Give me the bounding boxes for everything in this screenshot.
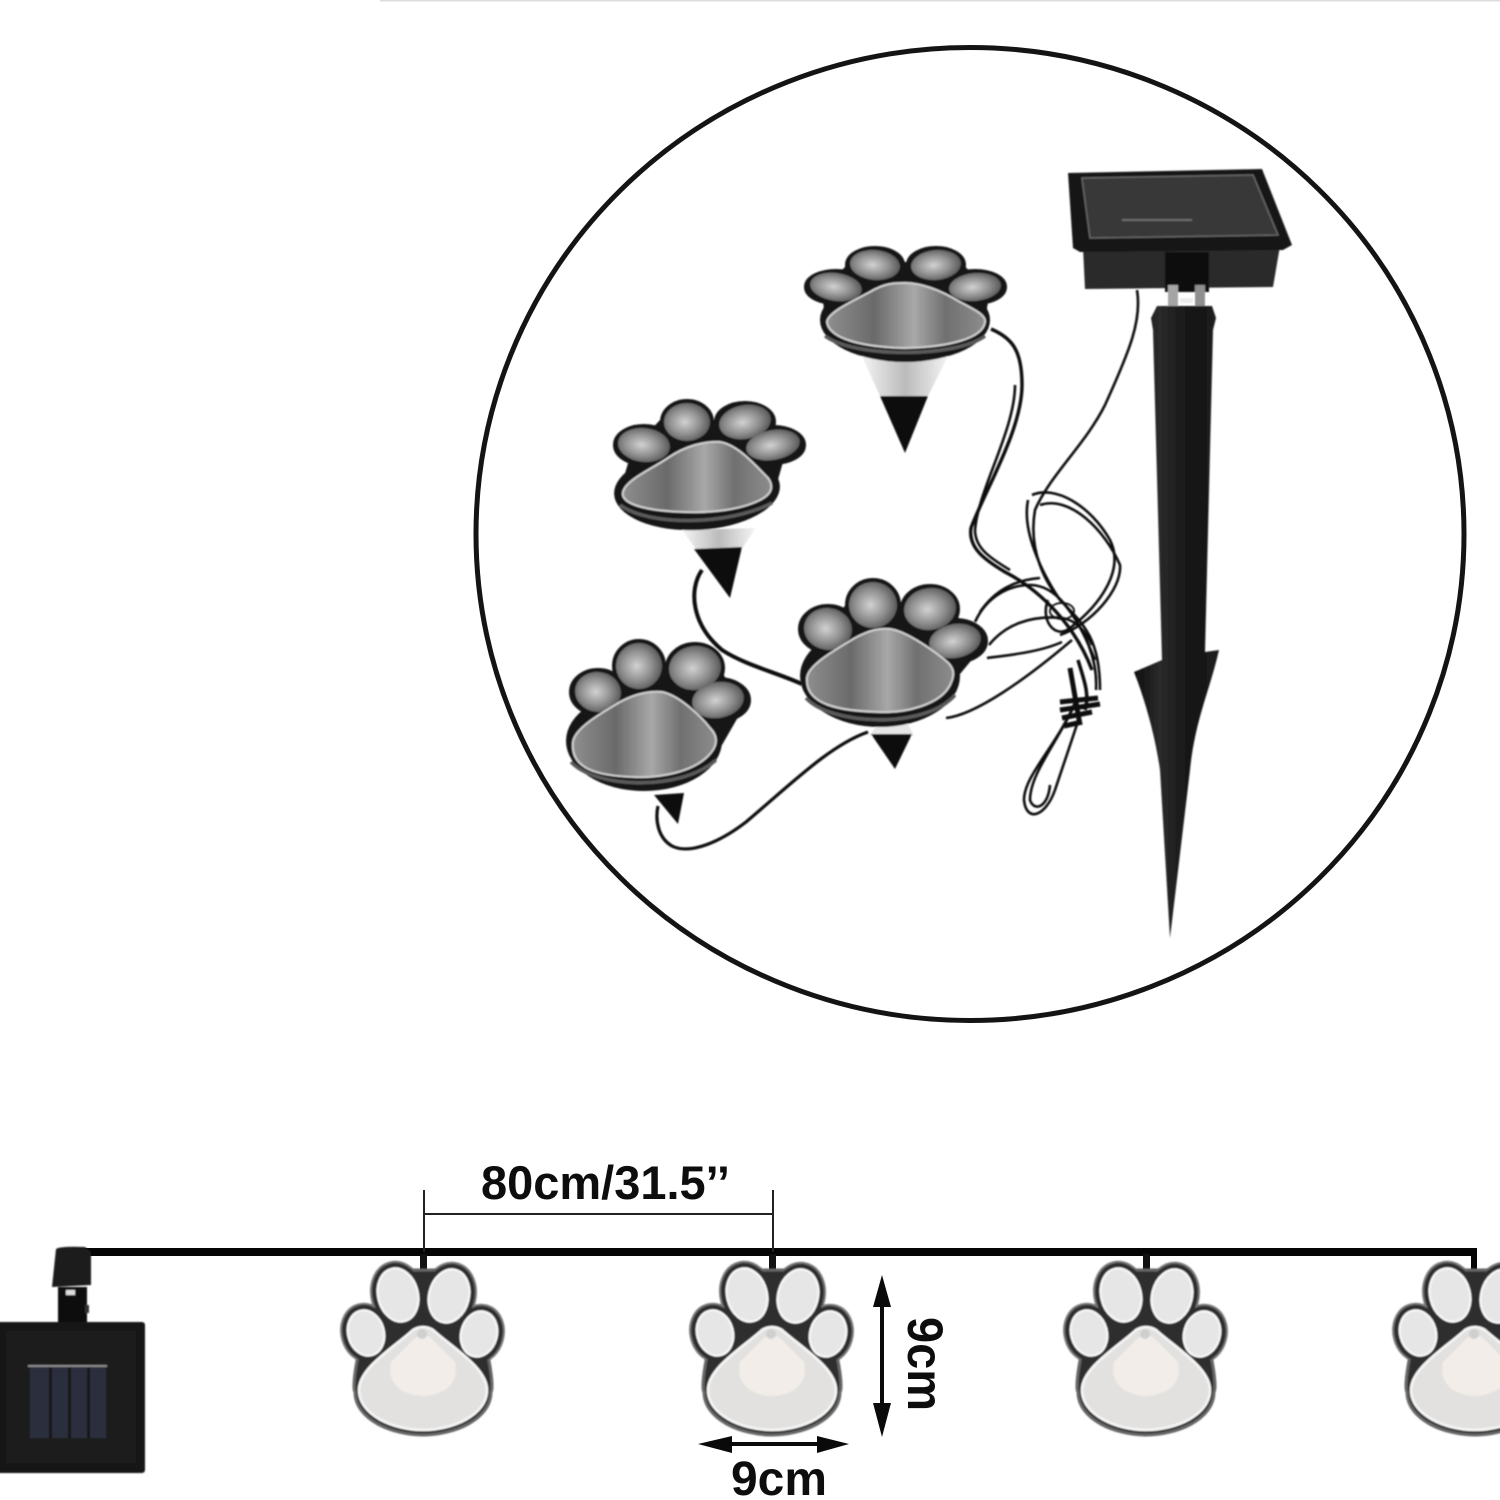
paw light front view 2	[690, 1263, 853, 1435]
panel: product circle	[476, 48, 1464, 1020]
top edge line	[380, 0, 1500, 2]
dimension: spacing between lights	[424, 1156, 773, 1252]
label: 9cm vertical: 9cm	[897, 1317, 953, 1411]
arrow: vertical	[873, 1275, 891, 1437]
paw light front view 3	[1064, 1263, 1227, 1435]
dimension: width	[698, 1436, 849, 1500]
label: 80cm/31.5: 80cm/31.5’’	[481, 1156, 730, 1209]
connector	[52, 1247, 91, 1322]
string cable	[72, 1248, 1477, 1280]
paw light front view 1	[341, 1263, 504, 1435]
paw light: bottom left	[566, 643, 747, 824]
wires connecting paw lights	[657, 290, 1138, 849]
arrow: horizontal	[698, 1436, 849, 1453]
spacing bracket	[424, 1190, 773, 1252]
paw light: left middle	[612, 401, 802, 598]
paw light: top	[808, 248, 1002, 453]
paw light: centre	[800, 582, 984, 769]
solar panel: left	[0, 1247, 145, 1473]
panel bracket	[1165, 252, 1209, 312]
solar cells	[28, 1365, 107, 1438]
paw light front view 4	[1393, 1263, 1500, 1435]
solar stake	[1068, 169, 1292, 938]
solar panel box	[1068, 169, 1292, 289]
dimension: height	[873, 1275, 953, 1437]
stake body	[1134, 306, 1219, 938]
